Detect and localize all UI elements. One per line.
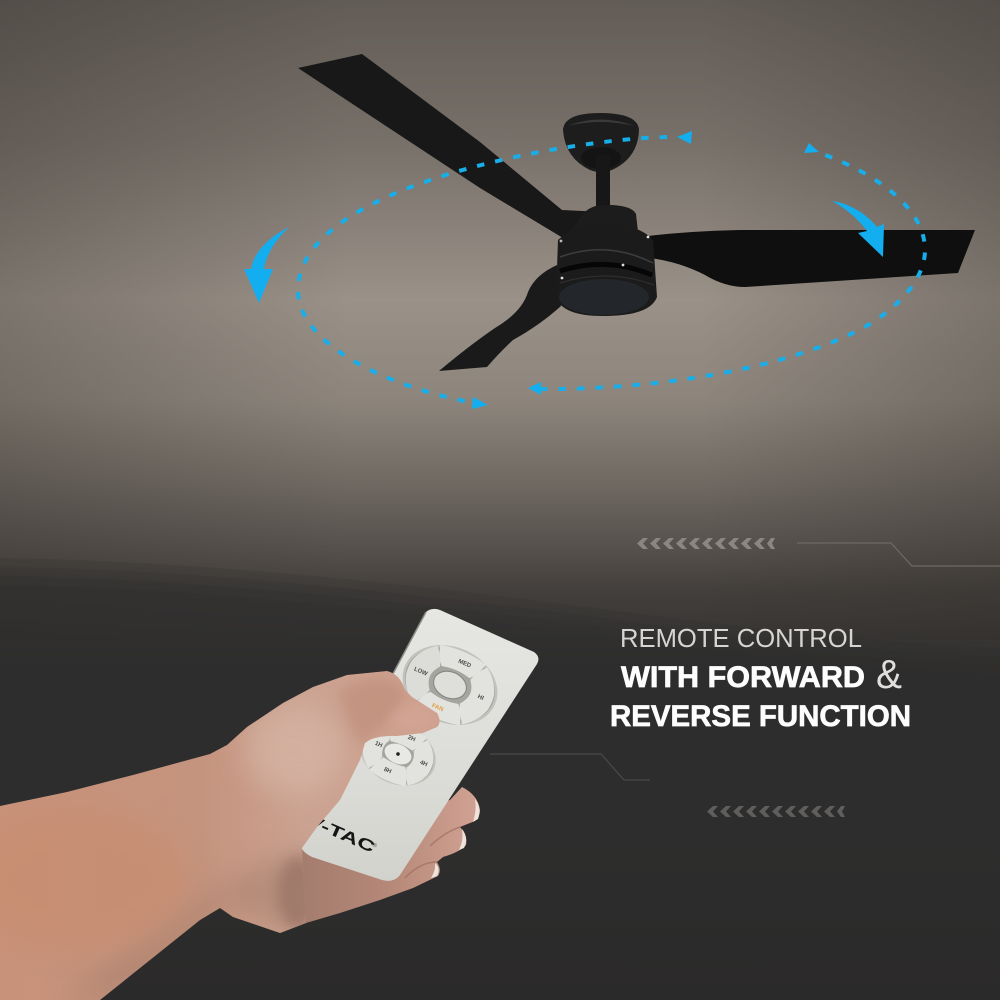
- thumb tip tone: [391, 704, 439, 732]
- brand logo: V-TAC: [304, 812, 378, 857]
- remote left edge shade: [301, 612, 426, 846]
- upper button pad: [390, 631, 510, 739]
- decorative circuit line, lower: [490, 754, 650, 780]
- fan blade: lower left: [439, 265, 561, 371]
- button labels: LOW: [413, 667, 428, 678]
- decorative circuit line, top right: [797, 543, 1000, 566]
- button labels: 4H: [419, 760, 428, 768]
- arrowhead: forward end bottom: [472, 397, 488, 409]
- dashed rotation path: forward: [298, 137, 667, 403]
- heading line 2: WITH FORWARD: [621, 661, 865, 694]
- arrowhead: reverse end top: [804, 143, 819, 153]
- button labels: 8H: [383, 767, 392, 775]
- nail 2: [459, 829, 466, 850]
- heading line 3: REVERSE FUNCTION: [610, 700, 911, 733]
- fan blade: upper left: [298, 54, 604, 238]
- heading line 1: REMOTE CONTROL: [620, 623, 862, 653]
- arrowhead: forward end top: [677, 131, 692, 144]
- hand: palm and fingers behind remote: [280, 787, 480, 933]
- lower button pad: [350, 711, 446, 797]
- ceiling fan: [298, 54, 975, 371]
- registered mark: ®: [371, 841, 379, 850]
- nail 1: [473, 799, 479, 822]
- fan blade: right: [648, 230, 975, 287]
- button labels: MED: [457, 659, 472, 670]
- curved arrow: right: [832, 201, 884, 257]
- remote body: [301, 609, 538, 881]
- shade where wrist meets palm: [276, 854, 306, 929]
- button labels: 2H: [407, 735, 416, 743]
- chevron row, bottom: [707, 806, 845, 817]
- ampersand: &: [876, 651, 902, 697]
- skin shade under wrist: [82, 852, 293, 1000]
- hand: forearm and thumb in front of remote: [0, 660, 450, 1000]
- fingers and palm: [280, 787, 480, 933]
- button labels: 1H: [374, 741, 383, 749]
- chevron row, top: [637, 538, 775, 549]
- motor coupling: [570, 205, 638, 232]
- finger crease 1: [430, 827, 460, 846]
- button labels: [374, 659, 485, 775]
- arrowhead: reverse end bottom: [528, 382, 541, 395]
- motor housing: [556, 223, 657, 316]
- nail 3: [431, 863, 439, 878]
- finger crease 2: [405, 862, 437, 878]
- button labels: FAN: [431, 703, 444, 713]
- skin tone above thumb crease: [342, 680, 402, 739]
- forearm warm tone: [104, 834, 174, 928]
- remote control: [301, 609, 538, 881]
- canopy: [563, 113, 639, 172]
- skin highlight on wrist: [245, 705, 345, 795]
- dashed rotation path: reverse: [540, 153, 925, 389]
- curved arrow: left: [244, 227, 289, 303]
- downrod: [596, 155, 610, 207]
- button labels: HI: [476, 694, 485, 702]
- heading text: [610, 623, 911, 733]
